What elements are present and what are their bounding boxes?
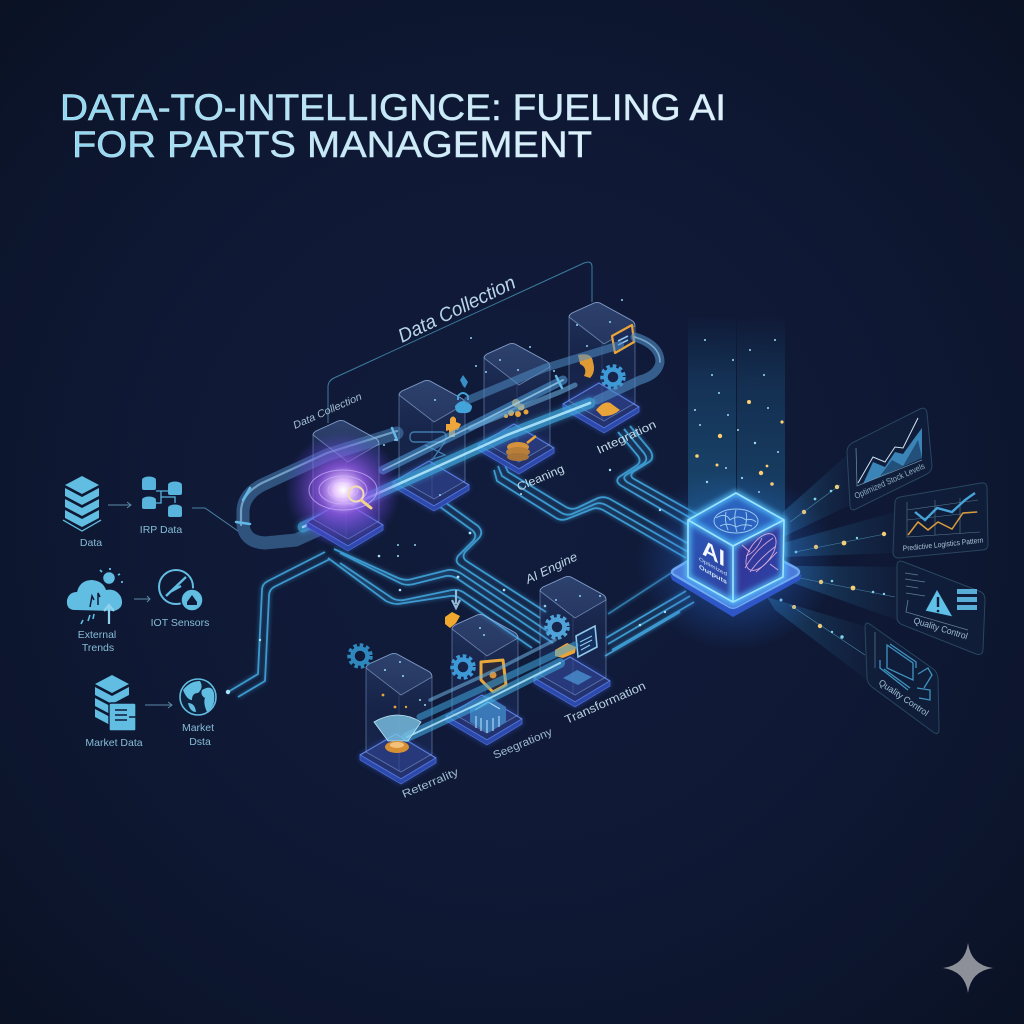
coin cluster (504, 399, 528, 418)
pipe upper (468, 345, 620, 400)
server block (470, 696, 506, 733)
puzzle icon (446, 416, 461, 437)
brain top (714, 509, 758, 533)
source: Market Data: Market Data (85, 737, 143, 749)
tank 1: data collection core (285, 420, 401, 551)
panel label: Quality Control (877, 677, 931, 718)
monitor icon (612, 325, 634, 353)
label: Transformation: Transformation (563, 679, 648, 727)
vertical light column above AI cube (688, 315, 785, 530)
title (60, 87, 726, 165)
panel label: Quality Control (912, 615, 969, 641)
tank C: gears and calendar (534, 576, 610, 707)
source: IOT Sensors (151, 570, 209, 629)
gear (602, 366, 624, 388)
scattered particles (383, 299, 623, 663)
source: Market Dsta globe: Dsta (189, 736, 211, 748)
source: External Trends: External (78, 629, 116, 641)
AI lettering (699, 534, 727, 586)
gear (452, 656, 474, 678)
panel 2: predictive logistics (893, 483, 988, 558)
arrow (108, 502, 131, 508)
big loop pipe (243, 433, 397, 543)
calendar (576, 626, 597, 657)
AI lettering: Outputs (699, 564, 727, 586)
line chart (907, 493, 980, 537)
brain right (740, 528, 782, 576)
arrow (145, 702, 172, 708)
end loop pipe (597, 337, 660, 400)
label: Seegrationy: Seegrationy (491, 726, 555, 762)
title: DATA-TO-INTELLIGNCE: FUELING AI (60, 87, 726, 128)
cube glow (636, 470, 836, 650)
heading: Data Collection: Data Collection (395, 272, 519, 347)
area chart (856, 418, 922, 486)
tank B: gear and tag (445, 590, 522, 745)
purple glow (285, 432, 401, 548)
tank A: funnel (349, 645, 436, 784)
base tech plate (563, 670, 592, 685)
icon: server with document (95, 675, 136, 731)
long pipe low (303, 403, 590, 527)
coin stack (506, 436, 536, 461)
big loop pipe highlight (241, 431, 397, 525)
source: Data: Data (80, 537, 102, 549)
orange block (555, 643, 576, 658)
orange base blob (596, 402, 620, 416)
circuit lines (192, 426, 700, 697)
cube faces (688, 520, 733, 602)
icon: database network (142, 476, 182, 517)
tank 4 with gear and monitor (563, 302, 639, 433)
yellow frame (481, 660, 506, 692)
source: Data (63, 476, 102, 549)
AI lettering: Optimized (699, 557, 727, 578)
tank 3 with coins (478, 344, 554, 474)
lower pipes (407, 640, 575, 737)
gear outside (349, 645, 371, 667)
warning triangle (925, 589, 953, 617)
icon: server stack (63, 476, 101, 531)
magnifier (348, 486, 371, 508)
panel label: Optimized Stock Levels (853, 461, 926, 501)
source: Market Data (85, 675, 143, 749)
panel 1: optimized stock levels (847, 408, 932, 510)
label: Data Collection small: Data Collection (291, 391, 364, 432)
data blocks (957, 589, 977, 610)
pipe system upper (236, 337, 660, 543)
lock icon (455, 375, 472, 413)
label: Cleaning: Cleaning (515, 463, 566, 494)
icon: sensor (159, 570, 203, 611)
gemini sparkle (943, 943, 993, 993)
icon: globe (180, 679, 216, 715)
arrow (134, 596, 150, 602)
source: IOT Sensors: IOT Sensors (151, 617, 209, 629)
source: Market Dsta globe: Market (182, 722, 214, 734)
AI cube (636, 470, 836, 650)
orange blob (445, 612, 460, 628)
source: Market Dsta globe (180, 679, 216, 748)
monitor icon (875, 632, 932, 700)
output beams from cube to panels (767, 455, 897, 680)
source: IRP Data: IRP Data (140, 524, 182, 536)
plate (670, 536, 802, 617)
pipe connector rings (236, 376, 562, 524)
blue gear blob (546, 616, 568, 638)
label: Integration: Integration (595, 419, 658, 457)
panel 4: quality control monitor (865, 623, 939, 733)
long pipe middle (383, 380, 563, 470)
source: External Trends: Trends (82, 642, 114, 654)
source: IRP Data (140, 476, 182, 536)
bracket line behind upper tanks (328, 262, 592, 423)
panel label: Predictive Logistics Pattern (902, 536, 984, 553)
panel 3: quality control warning (897, 561, 985, 654)
icon: cloud (67, 568, 123, 624)
arrow down (452, 590, 460, 608)
title: FOR PARTS MANAGEMENT (72, 124, 592, 165)
label: AI Engine: AI Engine (522, 550, 580, 587)
label: Reterrality: Reterrality (400, 766, 461, 801)
tank 2 body drawn behind pipes (393, 375, 472, 511)
glow edges (688, 493, 784, 602)
source: External Trends (67, 568, 123, 654)
orange swirl (578, 354, 594, 378)
AI lettering: AI (702, 536, 725, 573)
labels for lower stages (400, 679, 648, 801)
funnel (374, 715, 421, 753)
